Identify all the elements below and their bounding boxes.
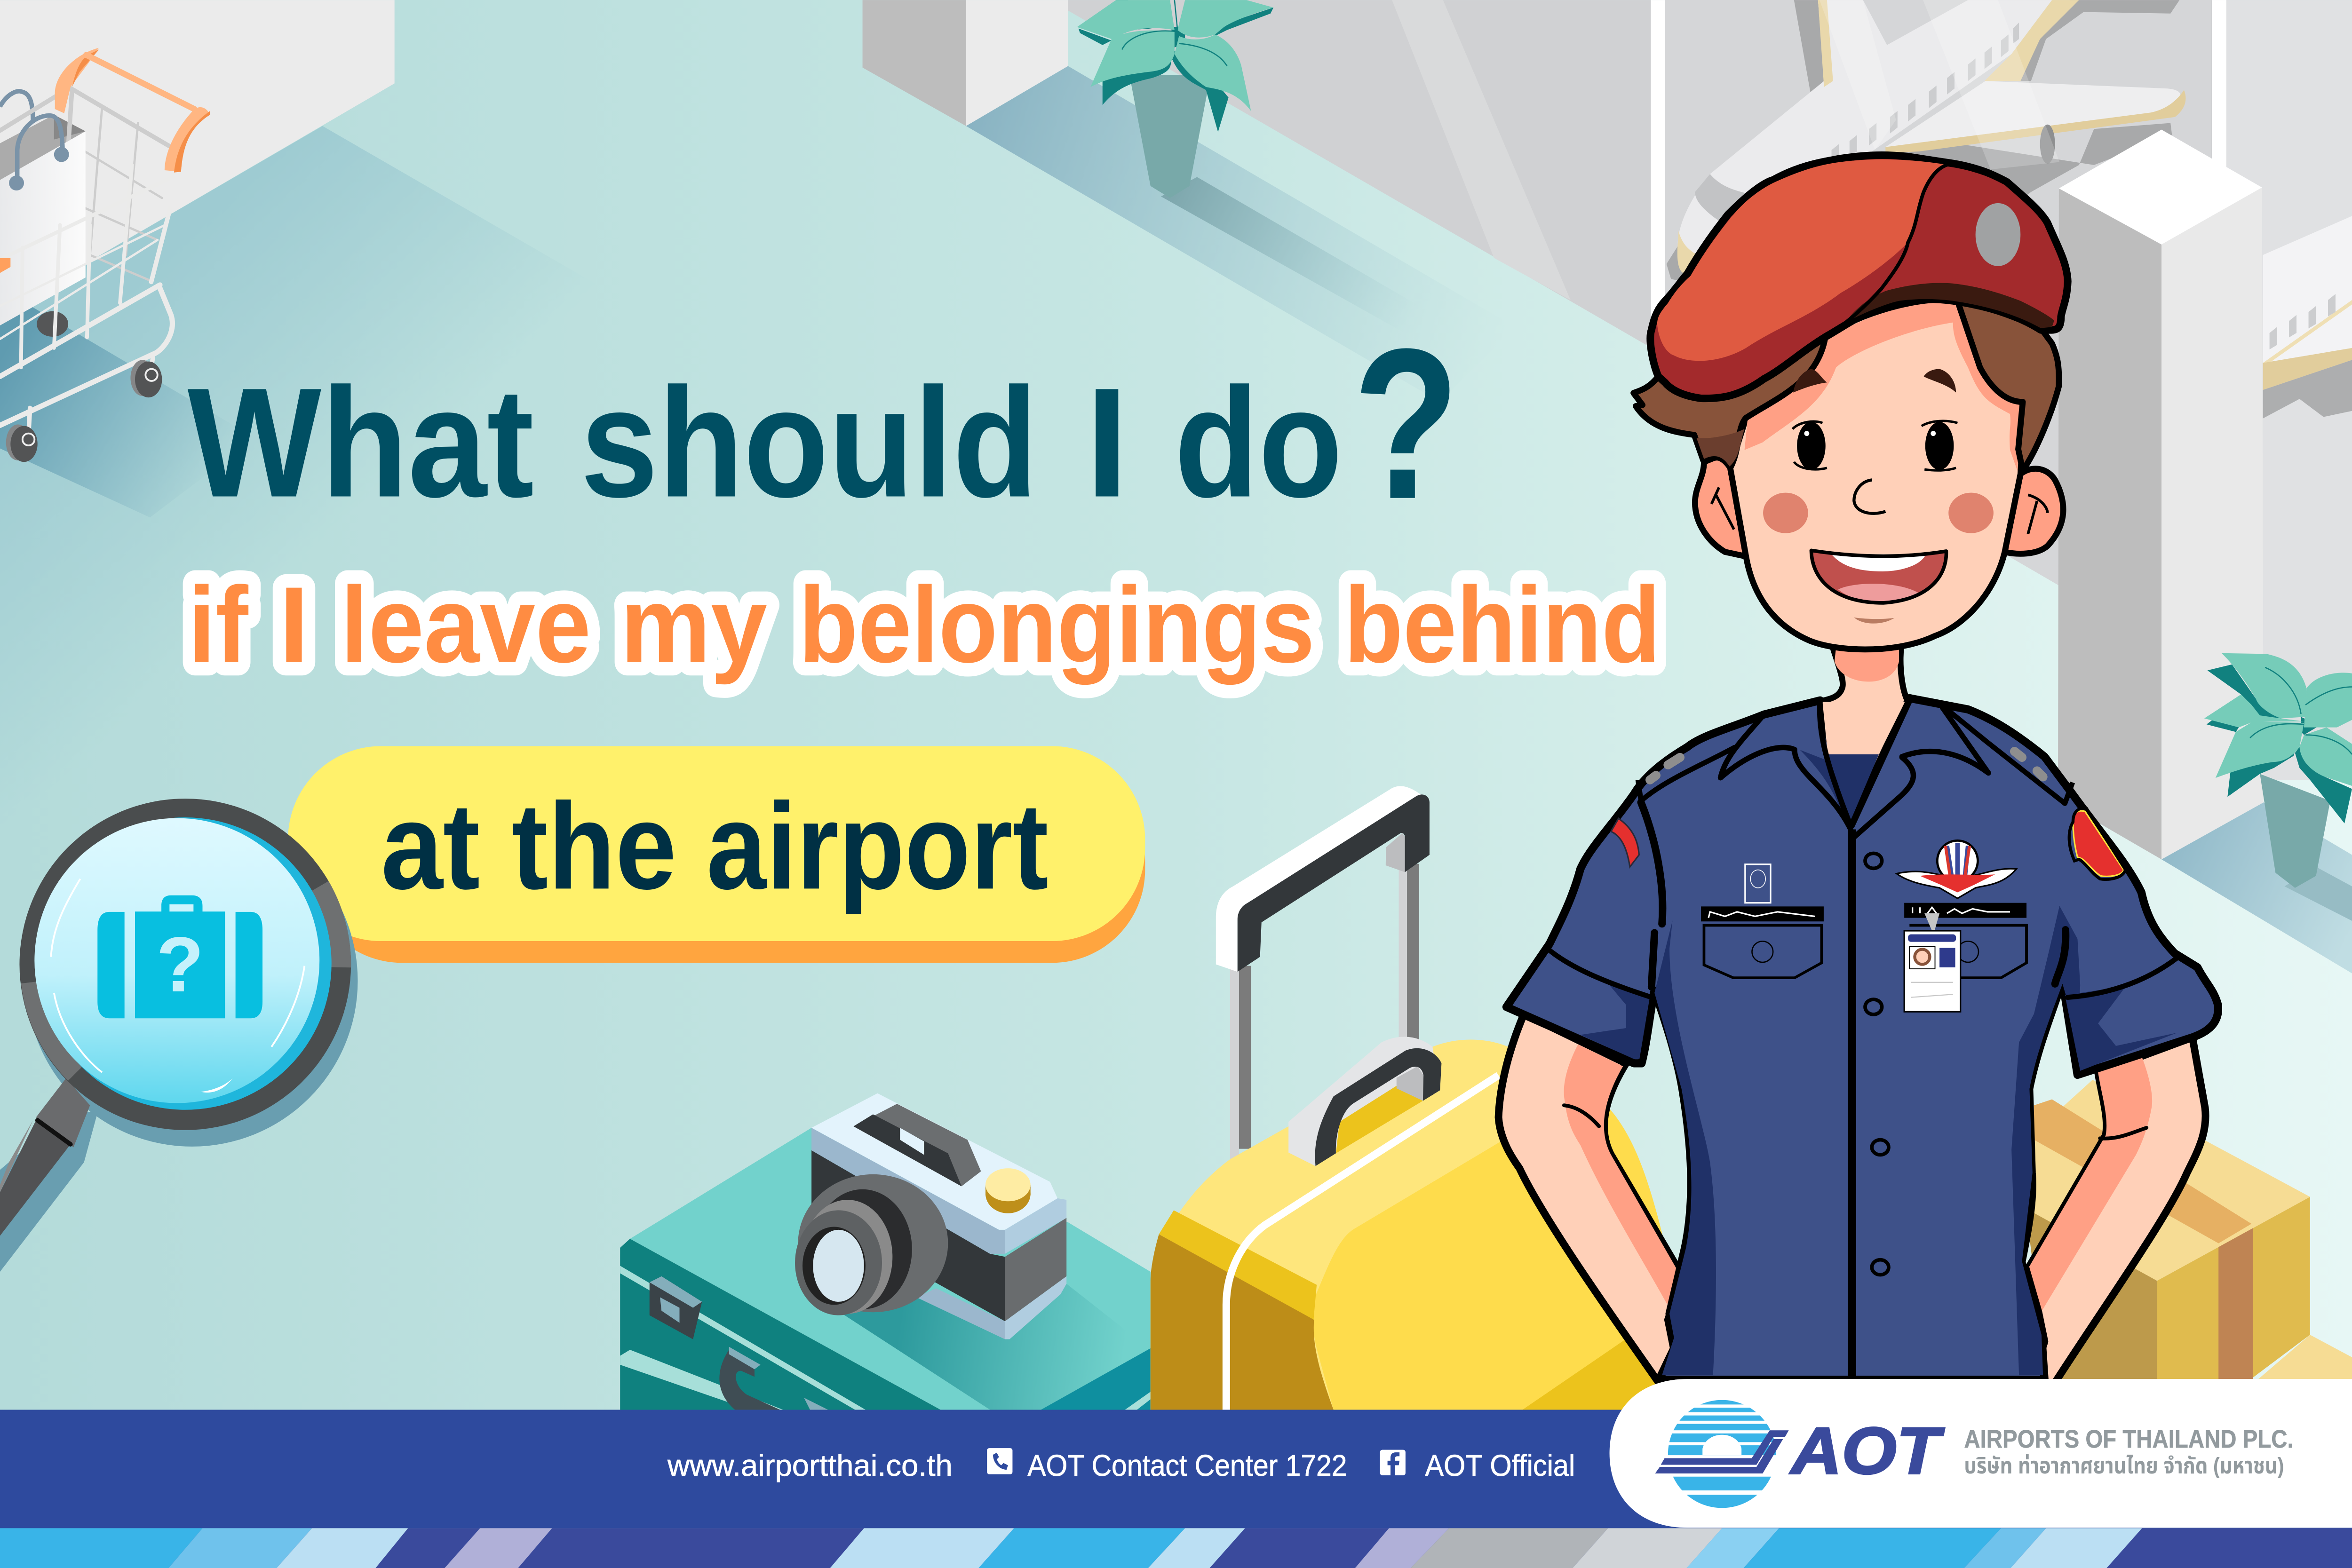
collar lines <box>1721 698 1988 840</box>
company name English: AIRPORTS OF THAILAND PLC. <box>1964 1425 2294 1453</box>
light leaves <box>2204 653 2352 786</box>
logo arch <box>1702 1435 1741 1455</box>
yellow suitcase <box>1151 786 1680 1410</box>
bag <box>0 131 86 325</box>
rear wheel <box>37 311 68 337</box>
small handle <box>1288 1037 1440 1166</box>
telescopic rods <box>1230 969 1239 1159</box>
handle <box>36 1078 90 1147</box>
right plant <box>2204 653 2352 888</box>
shopping cart <box>0 48 210 462</box>
title: What should I do?: do <box>1175 356 1343 530</box>
AOT logo <box>1655 1400 1789 1508</box>
forehead shadow <box>1745 302 2020 471</box>
skin V over neck opening <box>1822 702 1905 754</box>
yellow pill: at the airport: the <box>511 777 676 915</box>
front wire <box>0 165 173 435</box>
logo runway <box>1661 1430 1789 1465</box>
glass reflection bands <box>1820 0 2059 169</box>
top-left wall <box>0 0 395 314</box>
cardboard box <box>2010 1080 2352 1387</box>
airport officer character <box>1499 155 2218 1387</box>
airplane cast shadow <box>1667 0 2179 300</box>
lens glints <box>51 879 304 1072</box>
title: What should I do?: I <box>1085 356 1129 530</box>
AOT wordmark: AOT <box>1789 1414 1945 1488</box>
hair <box>1634 336 1826 468</box>
buttons <box>1865 853 1889 1275</box>
ID card <box>1904 913 1961 1012</box>
shirt <box>1506 698 2218 1380</box>
footer band <box>0 1410 2352 1528</box>
ears <box>1695 458 1746 556</box>
icon: facebook <box>1380 1450 1406 1475</box>
cheeks <box>1763 493 1808 533</box>
website text: www.airportthai.co.th <box>667 1449 953 1482</box>
teal suitcase <box>620 1128 1151 1410</box>
title: What should I do? <box>188 304 1460 544</box>
ring <box>19 799 351 1130</box>
rear column <box>863 0 1068 126</box>
suitcase latches <box>650 1276 702 1339</box>
window frames <box>1651 0 2226 357</box>
case body <box>1151 1040 1680 1410</box>
sleeve lines and seams <box>1547 949 2177 998</box>
subtitle: if I leave my belongings behind <box>188 564 1661 685</box>
left arm <box>1499 1014 1683 1387</box>
suitcase icon: ? <box>156 921 204 1008</box>
airplane left <box>1667 0 2186 300</box>
yellow pill: at the airport: at <box>381 777 480 915</box>
right pocket and name tag <box>1904 903 2026 978</box>
camera <box>795 1093 1066 1339</box>
contact center text: AOT Contact Center 1722 <box>1027 1449 1347 1482</box>
company name Thai: บริษัท ท่าอากาศยานไทย จำกัด (มหาชน) <box>1964 1454 2284 1479</box>
yellow pill: at the airport <box>288 746 1145 963</box>
subtitle: if I leave my belongings behind: I <box>279 564 309 685</box>
airplane right <box>2263 216 2352 419</box>
placket <box>1848 829 1856 1380</box>
icon: phone <box>987 1448 1012 1474</box>
subtitle: if I leave my belongings behind: leave <box>341 564 591 685</box>
back wall <box>1068 0 2352 780</box>
AOT Official text: AOT Official <box>1425 1449 1575 1482</box>
suitcase icon <box>97 895 262 1018</box>
shutter button <box>985 1174 1031 1213</box>
magnifying glass <box>0 799 358 1272</box>
nose <box>1854 480 1885 514</box>
right arm <box>2029 1037 2206 1387</box>
sleeve patch left <box>1611 818 1639 867</box>
cart back wire <box>0 88 169 280</box>
subtitle: if I leave my belongings behind: my <box>620 564 767 685</box>
subtitle: if I leave my belongings behind: behind <box>1344 564 1661 685</box>
dark leaf undersides <box>2207 665 2352 824</box>
title: What should I do?: should <box>580 356 1038 530</box>
subtitle: if I leave my belongings behind: belongings <box>799 564 1315 685</box>
eyebrows <box>1793 369 1827 393</box>
eyes <box>1793 421 1957 470</box>
light leaves <box>1077 0 1273 111</box>
pilot wings badge <box>1897 840 2017 898</box>
hat <box>1650 155 2068 398</box>
face <box>1730 300 2025 649</box>
rear plant <box>1077 0 1273 198</box>
head <box>1634 155 2068 649</box>
footer stripes <box>0 1528 2352 1568</box>
mouth <box>1811 550 1946 624</box>
logo globe <box>1665 1400 1779 1508</box>
dark leaf undersides <box>1079 0 1273 132</box>
orange handle <box>55 48 99 113</box>
shadow <box>26 815 358 1147</box>
shirt shading <box>1654 920 1716 1375</box>
subtitle: if I leave my belongings behind: if <box>188 564 248 685</box>
lens <box>798 1174 948 1312</box>
sleeve patch right <box>2073 811 2123 876</box>
title: What should I do?: ? <box>1353 304 1460 544</box>
lens <box>39 817 332 1110</box>
title: What should I do?: What <box>188 356 534 530</box>
left pocket and name tag <box>1701 864 1824 978</box>
neck <box>1818 643 1908 825</box>
epaulette marks <box>1650 752 2043 780</box>
logo plaque <box>1610 1379 2352 1528</box>
telescopic handle <box>1386 833 1405 872</box>
wheels <box>6 360 162 462</box>
front column <box>2058 130 2264 859</box>
floor shadows <box>0 66 2352 974</box>
yellow pill: at the airport: airport <box>707 777 1049 916</box>
bag and handle behind <box>0 115 86 180</box>
